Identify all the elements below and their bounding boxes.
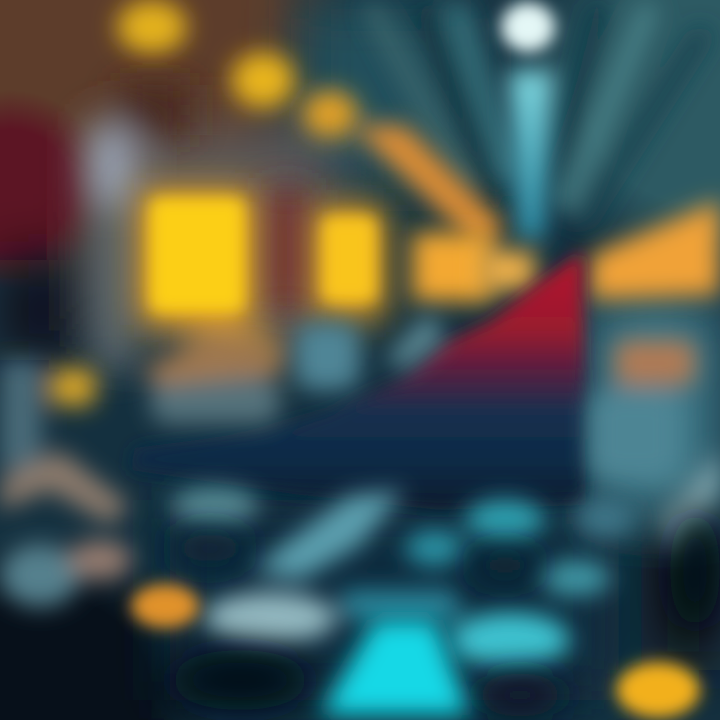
orange glow lower left	[131, 584, 199, 628]
cyan floor glow	[320, 620, 470, 715]
building overhead lights	[117, 0, 505, 250]
perspective rays upper right	[370, 5, 705, 225]
building columns	[88, 85, 312, 370]
glowing yellow windows	[150, 198, 720, 312]
red to navy area chart	[130, 252, 586, 510]
dark gaps	[170, 510, 720, 717]
light beam	[508, 70, 554, 240]
bright top light	[501, 2, 555, 52]
orange window halos	[140, 190, 386, 370]
mid-scene blocks	[0, 310, 720, 560]
yellow glow lower right	[616, 662, 700, 718]
lower teal panels	[0, 487, 635, 668]
